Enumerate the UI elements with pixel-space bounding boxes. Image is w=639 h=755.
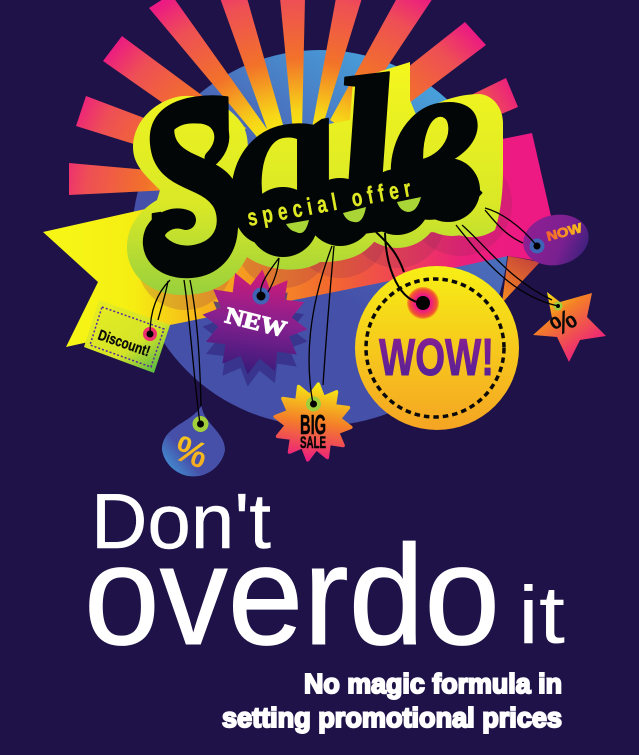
Sale word — [117, 0, 506, 313]
don't: Don't — [91, 477, 271, 565]
special offer: special offer — [245, 176, 413, 232]
scalloped green outline — [239, 148, 496, 268]
tag: percent star — [533, 292, 606, 362]
tag: discount — [84, 300, 170, 373]
S flourishes — [153, 116, 228, 268]
wow text: WOW! — [379, 329, 494, 387]
sun rays — [69, 0, 518, 195]
lower letter lobes — [237, 158, 480, 257]
Sale word: S — [117, 39, 268, 313]
scalloped shadow — [137, 152, 512, 310]
headline — [84, 477, 565, 675]
tag: percent drop — [162, 406, 225, 476]
orange wedge tip — [502, 256, 540, 303]
Sale word: l — [316, 28, 415, 285]
line one: No magic formula in — [304, 668, 562, 699]
percent sign: % — [545, 303, 582, 342]
discount text: Discount! — [96, 327, 152, 360]
blue circle — [132, 50, 508, 426]
now text: NOW — [545, 220, 584, 244]
overdo: overdo — [84, 516, 500, 675]
Sale word: a — [201, 20, 362, 296]
green letter backing — [127, 62, 503, 295]
Sale word: e — [358, 0, 506, 274]
tag: wow — [355, 266, 519, 430]
tag: now — [519, 209, 593, 271]
new text: NEW — [223, 303, 289, 342]
big text: BIG — [300, 409, 326, 440]
tag: big sale — [270, 379, 356, 465]
sale text: SALE — [300, 432, 326, 452]
letter counter crescents — [286, 197, 421, 233]
hanging strings — [150, 208, 558, 424]
artwork: sale burst — [43, 0, 553, 426]
subtitle — [222, 668, 562, 733]
colour burst band — [43, 133, 553, 347]
percent sign: % — [169, 427, 213, 476]
line two: setting promotional prices — [222, 702, 562, 733]
tag: new — [195, 262, 315, 394]
it: it — [518, 570, 565, 661]
